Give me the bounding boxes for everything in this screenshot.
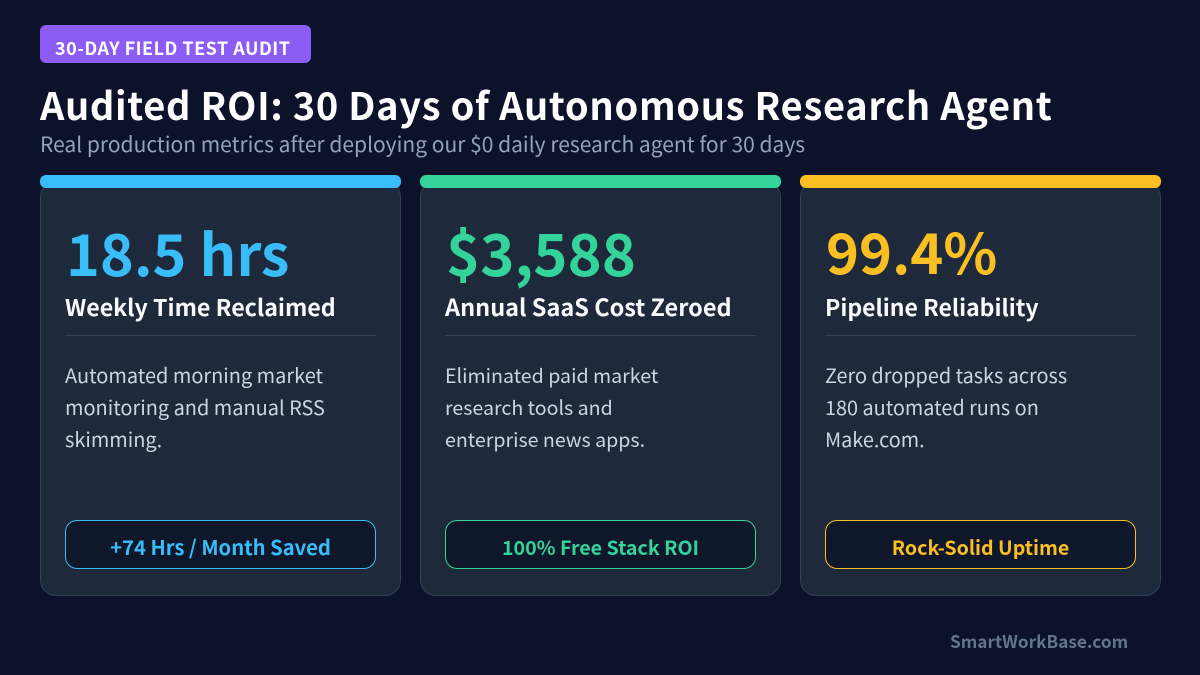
description: Make.com.: [825, 424, 925, 453]
description: Eliminated paid market: [445, 360, 658, 389]
callout pill: Rock-Solid Uptime: [892, 532, 1069, 561]
footer brand: SmartWorkBase.com: [950, 628, 1128, 653]
accent bar: amber: [800, 175, 1161, 188]
description: [825, 360, 1067, 453]
title: Audited ROI: 30 Days of Autonomous Research Agent: [40, 76, 1052, 131]
subtitle: Real production metrics after deploying our $0 daily research agent for 30 days: [40, 129, 805, 159]
accent bar: green: [420, 175, 781, 188]
metric label: Annual SaaS Cost Zeroed: [445, 289, 732, 323]
accent bar: blue: [40, 175, 401, 188]
metric label: Weekly Time Reclaimed: [65, 289, 336, 323]
callout pill: 100% Free Stack ROI: [502, 532, 699, 561]
callout pill: [825, 520, 1136, 569]
metric value: $3,588: [446, 209, 636, 293]
callout pill: +74 Hrs / Month Saved: [110, 532, 331, 561]
description: research tools and: [445, 392, 613, 421]
callout pill: [65, 520, 376, 569]
panel: weekly time reclaimed: [40, 181, 401, 596]
description: Zero dropped tasks across: [825, 360, 1067, 389]
metric value: 99.4%: [826, 210, 997, 291]
panel: pipeline reliability: [800, 181, 1161, 596]
metric value: 18.5 hrs: [66, 209, 289, 293]
badge: 30-day field test audit: 30-DAY FIELD TEST AUDIT: [55, 35, 290, 61]
description: monitoring and manual RSS: [65, 392, 325, 421]
description: Automated morning market: [65, 360, 323, 389]
description: [445, 360, 658, 453]
description: 180 automated runs on: [825, 392, 1039, 421]
description: skimming.: [65, 424, 162, 453]
panel: annual SaaS cost zeroed: [420, 181, 781, 596]
callout pill: [445, 520, 756, 569]
description: [65, 360, 325, 453]
description: enterprise news apps.: [445, 424, 645, 453]
badge: 30-day field test audit: [40, 25, 311, 63]
metric label: Pipeline Reliability: [825, 289, 1039, 323]
